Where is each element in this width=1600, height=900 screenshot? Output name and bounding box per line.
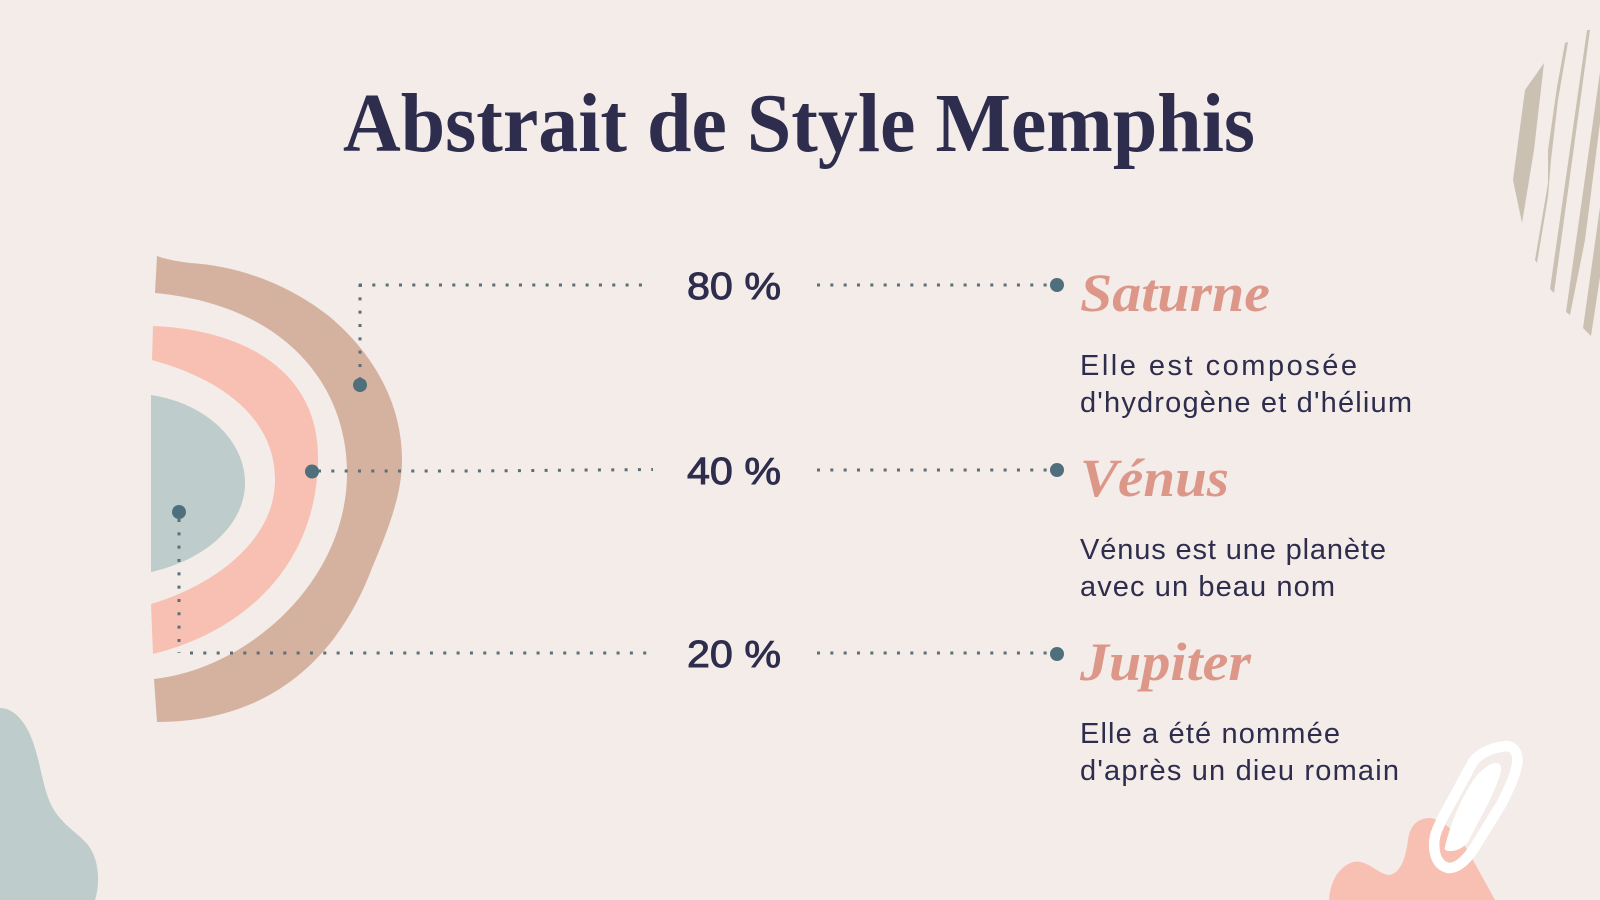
text block: Saturne: d'hydrogène et d'hélium <box>1080 387 1412 419</box>
text block: Vénus: Vénus est une planète <box>1080 534 1386 566</box>
text block: Saturne: Elle est composée <box>1080 350 1357 382</box>
connector: Saturne right <box>817 278 1064 292</box>
percentage: 40 %: 40 % <box>687 451 781 493</box>
text block: Vénus: avec un beau nom <box>1080 571 1335 603</box>
connector: Vénus left <box>305 464 653 478</box>
text block: Saturne: Saturne <box>1080 263 1270 323</box>
arc: middle Vénus <box>151 326 318 654</box>
text block: Saturne <box>1080 263 1412 419</box>
text block: Jupiter: d'après un dieu romain <box>1080 755 1399 787</box>
percentage: 20 %: 20 % <box>687 634 781 676</box>
connector: Vénus right <box>817 463 1064 477</box>
connector: Jupiter left <box>172 505 650 653</box>
decoration: pink blob bottom right <box>1329 818 1495 900</box>
decoration: beige brush strokes top right <box>1513 30 1600 336</box>
text block: Jupiter: Jupiter <box>1079 632 1252 692</box>
text block: Jupiter: Elle a été nommée <box>1080 718 1340 750</box>
title: Abstrait de Style Memphis <box>343 77 1255 170</box>
connector: Jupiter right <box>817 647 1064 661</box>
decoration: blue-grey blob bottom left <box>0 708 98 900</box>
text block: Vénus: Vénus <box>1080 448 1229 508</box>
decoration: white paperclip shape <box>1434 746 1518 868</box>
text block: Jupiter <box>1079 632 1399 787</box>
chart: concentric half-circles <box>151 256 402 722</box>
arc: inner Jupiter <box>151 395 245 572</box>
arc: outer Saturne <box>154 256 402 722</box>
connector: Saturne left <box>353 284 645 392</box>
text block: Vénus <box>1080 448 1386 603</box>
percentage: 80 %: 80 % <box>687 266 781 308</box>
